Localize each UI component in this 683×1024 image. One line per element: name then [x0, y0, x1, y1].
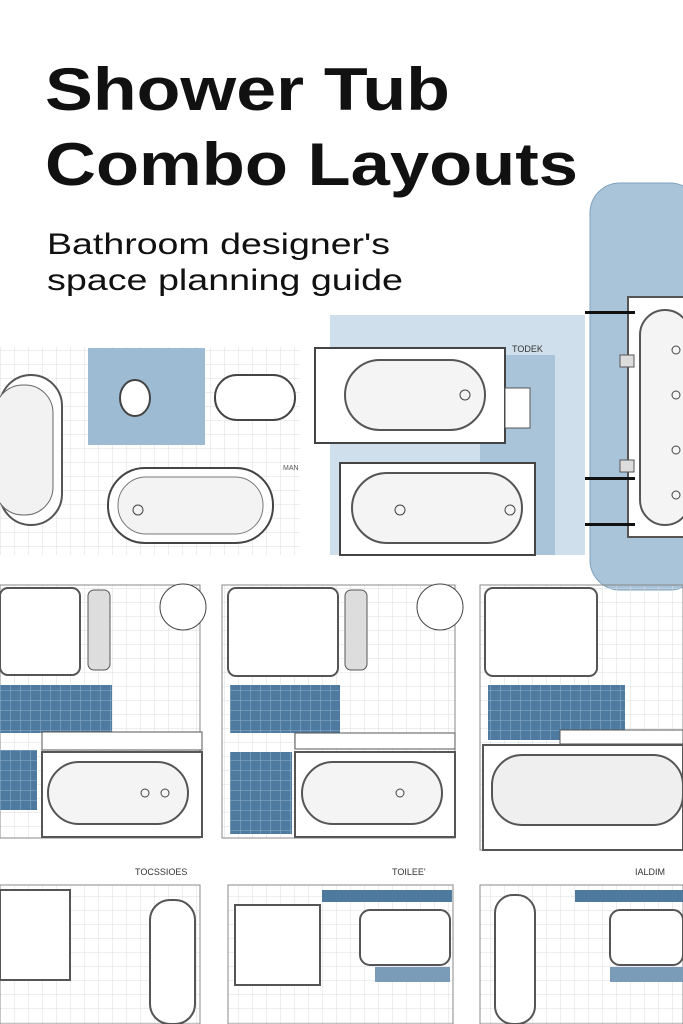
panel: top left plan: MAN [283, 465, 299, 472]
subtitle: space planning guide [47, 264, 403, 297]
subtitle: Bathroom designer's [47, 228, 390, 261]
labels: TOILEE' [392, 867, 426, 877]
panel: bottom left [0, 885, 200, 1024]
panel: middle center layout [222, 584, 463, 838]
panel: middle right layout [480, 585, 683, 850]
panel: top center plan: TODEK [512, 344, 543, 354]
subtitle [47, 228, 403, 297]
labels [135, 867, 665, 877]
labels: TOCSSIOES [135, 867, 187, 877]
labels: IALDIM [635, 867, 665, 877]
panel: top center plan [315, 315, 585, 555]
title: Combo Layouts [45, 131, 578, 198]
panel: middle left layout [0, 584, 206, 838]
panel: bottom center [228, 885, 453, 1024]
title [45, 56, 578, 198]
panel: top left plan [0, 347, 300, 555]
panel: right tub [585, 183, 683, 590]
panel: bottom right [480, 885, 683, 1024]
title: Shower Tub [45, 56, 450, 123]
